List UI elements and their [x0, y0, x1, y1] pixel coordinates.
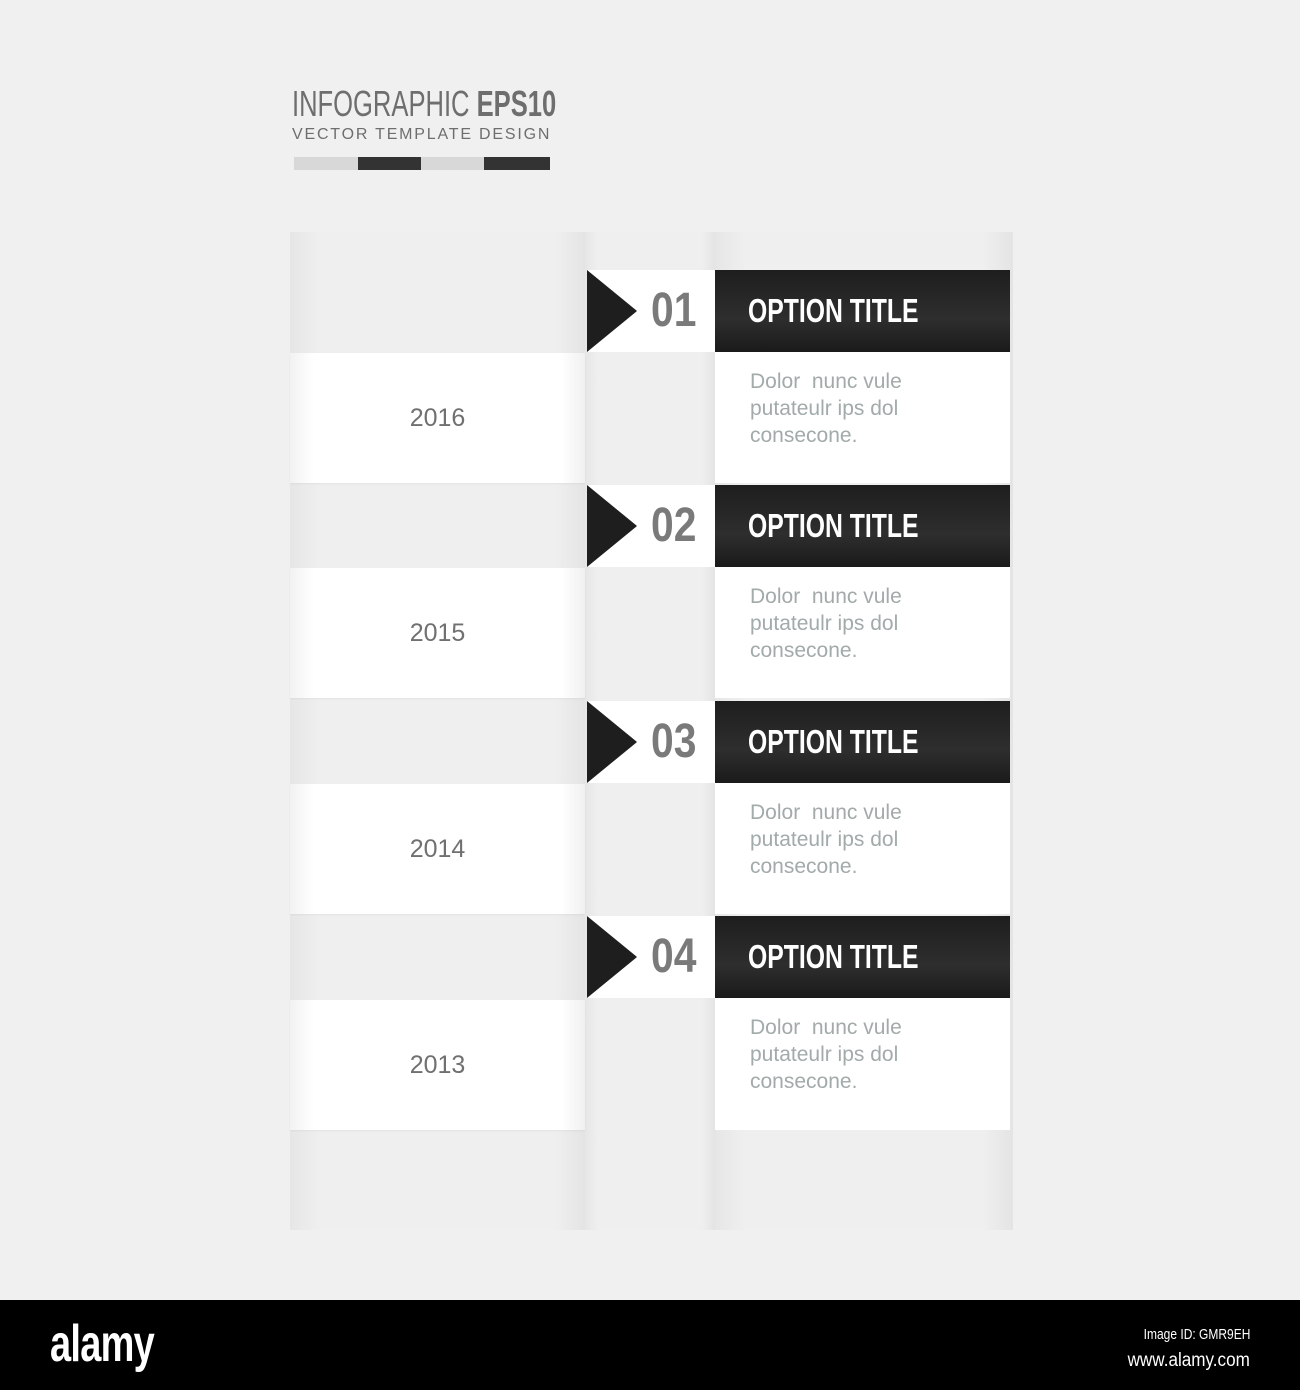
body 01: Dolor nunc vule: [750, 370, 902, 393]
body 01: putateulr ips dol: [750, 397, 898, 420]
header 01: [715, 270, 1010, 352]
number box 03: [587, 701, 715, 783]
body 01: consecone.: [750, 424, 857, 447]
footer bar: [0, 1300, 1300, 1390]
header 03: OPTION TITLE: [748, 723, 918, 760]
header 04: [715, 916, 1010, 998]
body 03: putateulr ips dol: [750, 828, 898, 851]
middle column: [585, 232, 715, 1230]
number box 03: 03: [651, 715, 696, 768]
year 2013: [290, 1000, 585, 1130]
number box 04: 04: [651, 930, 696, 983]
body 04: putateulr ips dol: [750, 1043, 898, 1066]
header 01: OPTION TITLE: [748, 292, 918, 329]
footer id: [1128, 1326, 1250, 1371]
header 02: OPTION TITLE: [748, 507, 918, 544]
number box 02: [587, 485, 715, 567]
year 2015: [290, 568, 585, 698]
item 03: [587, 701, 1010, 914]
body 04: [715, 998, 1010, 1130]
left column: [290, 232, 585, 1230]
body 02: consecone.: [750, 639, 857, 662]
body 02: [715, 567, 1010, 698]
body 03: Dolor nunc vule: [750, 801, 902, 824]
header 02: [715, 485, 1010, 567]
body 02: putateulr ips dol: [750, 612, 898, 635]
body 04: consecone.: [750, 1070, 857, 1093]
footer id: Image ID: GMR9EH: [1143, 1326, 1250, 1343]
title bar: [294, 157, 550, 170]
number box 02: 02: [651, 499, 696, 552]
header 04: OPTION TITLE: [748, 938, 918, 975]
year 2016: [290, 353, 585, 483]
title: [292, 83, 556, 143]
footer id: www.alamy.com: [1128, 1350, 1250, 1371]
item 02: [587, 485, 1010, 698]
year 2013: 2013: [410, 1051, 465, 1079]
footer logo: alamy: [50, 1315, 154, 1373]
item 01: [587, 270, 1010, 483]
subtitle: VECTOR TEMPLATE DESIGN: [292, 126, 551, 143]
year 2014: [290, 784, 585, 914]
item 04: [587, 916, 1010, 1130]
body 01: [715, 352, 1010, 483]
title: INFOGRAPHIC EPS10: [292, 83, 556, 124]
number box 01: [587, 270, 715, 352]
number box 04: [587, 916, 715, 998]
body 03: consecone.: [750, 855, 857, 878]
right column: [715, 232, 1013, 1230]
year 2015: 2015: [410, 619, 465, 647]
year 2014: 2014: [410, 835, 465, 863]
body 02: Dolor nunc vule: [750, 585, 902, 608]
body 04: Dolor nunc vule: [750, 1016, 902, 1039]
body 03: [715, 783, 1010, 914]
number box 01: 01: [651, 284, 696, 337]
header 03: [715, 701, 1010, 783]
year 2016: 2016: [410, 404, 465, 432]
